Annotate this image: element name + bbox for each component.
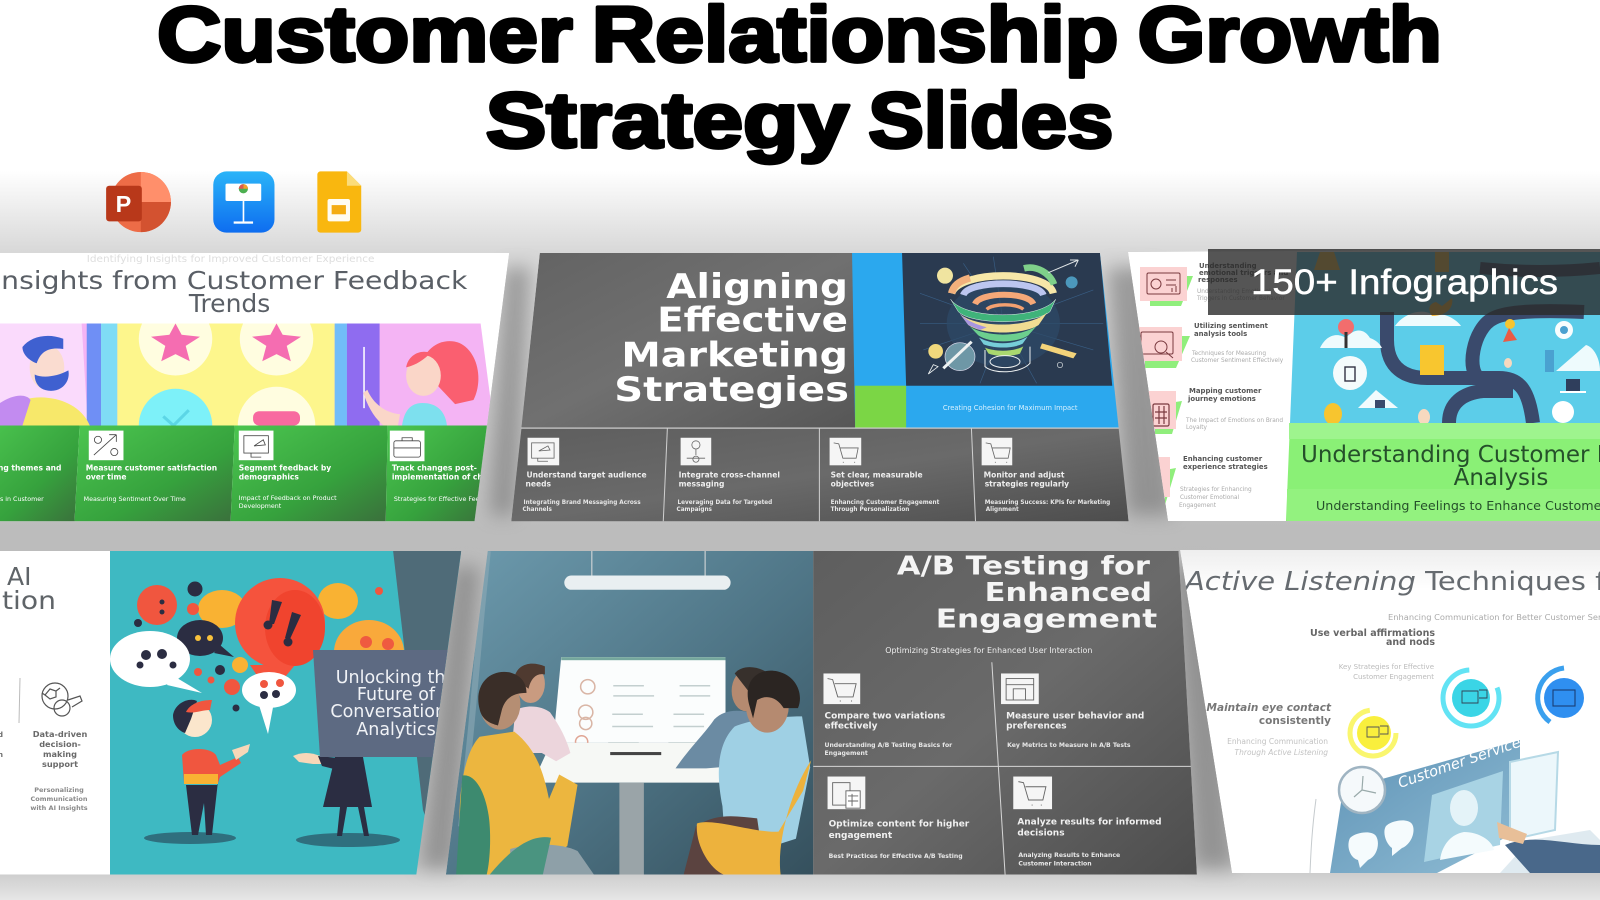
columns text: Monitor and adjust bbox=[984, 471, 1065, 480]
columns text bbox=[522, 471, 1110, 513]
heading: tion bbox=[2, 586, 56, 615]
columns text: Leveraging Data for Targeted bbox=[678, 500, 772, 506]
quadrant text: Customer Interaction bbox=[1018, 860, 1092, 867]
text block: eye contact: Through Active Listening bbox=[1235, 748, 1328, 757]
icon tiles bbox=[89, 431, 424, 461]
icon: PowerPoint: P bbox=[116, 191, 131, 217]
list text: Understanding Emotional bbox=[1197, 289, 1271, 295]
icon rings bbox=[1350, 668, 1584, 756]
heading: Engagement bbox=[936, 605, 1157, 635]
quadrant text: Key Metrics to Measure in A/B Tests bbox=[1007, 742, 1131, 749]
illustration: customer service monitor bbox=[1310, 735, 1600, 873]
quadrant text bbox=[824, 711, 1162, 867]
list text: experience strategies bbox=[1183, 463, 1268, 471]
icon: Keynote bbox=[213, 171, 274, 233]
heading: Active Listening Techniques for bbox=[1183, 567, 1600, 597]
text block: verbal affirmations: Customer Engagement bbox=[1353, 673, 1434, 681]
quadrant text: Analyze results for informed bbox=[1017, 817, 1162, 827]
list text: analysis tools bbox=[1194, 330, 1247, 338]
person: yellow jacket bbox=[459, 732, 578, 874]
quadrant text: effectively bbox=[824, 722, 878, 732]
columns text: Through Personalization bbox=[831, 507, 909, 513]
panel: customer feedback slide bbox=[0, 253, 509, 521]
green band bbox=[1286, 439, 1600, 521]
panel text: Conversational bbox=[330, 702, 462, 722]
list text: The Impact of Emotions on Brand bbox=[1185, 418, 1283, 424]
columns text: implementation of changes bbox=[392, 473, 509, 482]
illustration: conversation bbox=[110, 550, 470, 880]
columns text: Channels bbox=[522, 507, 552, 513]
slide base bbox=[0, 253, 509, 521]
list text: journey emotions bbox=[1187, 395, 1256, 403]
text block: verbal affirmations: and nods bbox=[1386, 637, 1435, 648]
slide base bbox=[1180, 550, 1600, 873]
columns text: Integrate cross-channel bbox=[679, 471, 780, 480]
columns text bbox=[0, 463, 509, 510]
columns text: Alignment bbox=[986, 507, 1019, 513]
list text: Customer Emotional bbox=[1180, 495, 1240, 501]
heading bbox=[614, 267, 849, 409]
list text: Strategies for Enhancing bbox=[1180, 487, 1252, 493]
quadrant text: engagement bbox=[829, 831, 893, 841]
list text: Triggers in Customer Behavior bbox=[1196, 296, 1285, 302]
icon: football and whistle bbox=[42, 683, 82, 716]
columns text: messaging bbox=[679, 480, 724, 489]
columns text: strategies regularly bbox=[985, 480, 1069, 489]
panel: customer emotion slide bbox=[1128, 249, 1600, 521]
title line 2 bbox=[486, 78, 1113, 164]
slide base bbox=[1128, 252, 1295, 521]
item text bbox=[33, 729, 87, 769]
quadrant text: Best Practices for Effective A/B Testing bbox=[829, 853, 963, 860]
heading: Marketing bbox=[621, 335, 848, 374]
divider bbox=[19, 678, 20, 723]
columns text: Impact of Feedback on Product bbox=[239, 495, 337, 502]
item text: decision- bbox=[39, 739, 81, 749]
icon: Google Slides bbox=[317, 171, 361, 233]
quadrant text: Measure user behavior and bbox=[1006, 711, 1144, 721]
panel text: Future of bbox=[357, 685, 436, 705]
green band bbox=[0, 426, 489, 521]
person: left back bbox=[511, 707, 570, 761]
list text: responses bbox=[1198, 276, 1238, 284]
illustration: funnel bbox=[902, 253, 1112, 386]
columns text: Strategies for Effective Feedback bbox=[394, 496, 499, 503]
list text: Techniques for Measuring bbox=[1191, 351, 1266, 357]
list text: Utilizing sentiment bbox=[1194, 322, 1269, 330]
heading: AI bbox=[7, 562, 31, 591]
quadrant text: Optimize content for higher bbox=[829, 820, 970, 830]
text block: eye contact: consistently bbox=[1259, 715, 1331, 727]
slide base bbox=[521, 253, 857, 428]
columns text: Measuring Success: KPIs for Marketing bbox=[985, 500, 1110, 506]
boy bbox=[144, 832, 236, 844]
lower band bbox=[511, 429, 1129, 521]
columns text: Measuring Sentiment Over Time bbox=[84, 496, 186, 503]
columns text: Understand target audience bbox=[527, 471, 647, 480]
item text: support bbox=[42, 759, 78, 769]
title line 2: Strategy bbox=[486, 78, 849, 164]
heading: Analysis bbox=[1454, 465, 1548, 491]
columns text: Integrating Brand Messaging Across bbox=[523, 500, 641, 506]
item text: Data-driven bbox=[33, 729, 87, 739]
list text: Customer Sentiment Effectively bbox=[1191, 358, 1284, 364]
banner: 150+ Infographics: 150+ Infographics bbox=[1251, 263, 1558, 302]
illustration: customer service monitor: Customer Service bbox=[1396, 735, 1523, 792]
list text: Mapping customer bbox=[1189, 387, 1262, 395]
illustration: review app bbox=[0, 324, 490, 426]
list text: Enhancing customer bbox=[1183, 455, 1263, 463]
text block: eye contact bbox=[1207, 702, 1332, 757]
heading: Aligning bbox=[666, 267, 848, 306]
subtitle: Optimizing Strategies for Enhanced User Interaction bbox=[885, 645, 1092, 655]
panel: marketing slide bbox=[511, 253, 1129, 521]
illustration: map bbox=[1288, 250, 1600, 425]
subtitle: Identifying Insights for Improved Customer Experience bbox=[87, 254, 375, 265]
heading: A/B Testing for bbox=[897, 551, 1151, 581]
slide shadows bbox=[420, 267, 1235, 867]
quadrant text: Compare two variations bbox=[824, 711, 945, 721]
heading bbox=[897, 551, 1157, 635]
heading: Enhanced bbox=[985, 578, 1152, 608]
columns text: needs bbox=[526, 480, 552, 489]
text block: verbal affirmations: Use verbal affirmations bbox=[1310, 628, 1435, 639]
columns text: Measure customer satisfaction bbox=[86, 463, 217, 472]
list text: Loyalty bbox=[1186, 425, 1208, 431]
banner: 150+ Infographics bbox=[1208, 249, 1600, 315]
quadrant text: preferences bbox=[1006, 722, 1067, 732]
panel text: Analytics bbox=[356, 720, 436, 740]
right panel bbox=[813, 551, 1197, 874]
photo: meeting room bbox=[446, 551, 813, 874]
icon: PowerPoint bbox=[106, 172, 171, 232]
panel text: Unlocking the bbox=[336, 668, 456, 688]
analytics panel bbox=[313, 650, 460, 757]
heading bbox=[2, 567, 54, 610]
panel: AI conversation analytics slide: with AI Insights bbox=[30, 804, 88, 812]
panel text bbox=[331, 670, 444, 738]
dividers bbox=[813, 662, 1196, 874]
item text: making bbox=[43, 749, 77, 759]
man bbox=[22, 397, 90, 426]
list text bbox=[1179, 262, 1288, 509]
panel: AI conversation analytics slide: Personalizing bbox=[34, 786, 84, 794]
text block: verbal affirmations: Key Strategies for Effective bbox=[1339, 663, 1434, 671]
heading bbox=[1301, 442, 1600, 513]
person: right back bbox=[676, 711, 757, 768]
person: blue shirt bbox=[719, 716, 810, 855]
text block: eye contact: Maintain eye contact bbox=[1207, 702, 1332, 714]
heading: Insights from Customer Feedback bbox=[0, 266, 468, 295]
caption: Creating Cohesion for Maximum Impact bbox=[943, 403, 1078, 412]
heading: Trends bbox=[188, 289, 270, 318]
icon tiles bbox=[823, 673, 1052, 809]
quadrant text: Analyzing Results to Enhance bbox=[1018, 852, 1120, 859]
columns text: over time bbox=[86, 473, 126, 482]
columns text: Segment feedback by bbox=[239, 463, 331, 472]
columns text: objectives bbox=[831, 480, 875, 489]
woman bbox=[296, 833, 400, 847]
quadrant text: Understanding A/B Testing Basics for bbox=[824, 742, 952, 749]
panel: A/B testing slide bbox=[446, 551, 1197, 874]
panel: active listening slide bbox=[1180, 550, 1600, 873]
columns text: Enhancing Customer Engagement bbox=[831, 500, 940, 506]
list icons bbox=[1135, 267, 1193, 505]
heading: Strategies bbox=[614, 370, 849, 409]
colour blocks bbox=[852, 253, 1120, 428]
columns text: Set clear, measurable bbox=[831, 471, 923, 480]
quadrant text: decisions bbox=[1017, 829, 1065, 839]
chairs bbox=[456, 775, 490, 874]
columns text: demographics bbox=[239, 473, 299, 482]
text block: eye contact: Enhancing Communication bbox=[1227, 737, 1328, 746]
heading: Effective bbox=[657, 301, 848, 340]
title line 1 bbox=[157, 0, 1442, 78]
quadrant text: Engagement bbox=[824, 750, 868, 757]
columns text: s in Customer bbox=[0, 496, 44, 503]
columns text: Campaigns bbox=[677, 507, 713, 513]
woman bbox=[428, 341, 478, 404]
list text: Engagement bbox=[1179, 503, 1217, 509]
panel: AI conversation analytics slide bbox=[0, 550, 470, 880]
list text: Understanding bbox=[1199, 262, 1257, 270]
panel: AI conversation analytics slide: Communication bbox=[31, 795, 88, 803]
slide base bbox=[0, 550, 110, 880]
icon tiles bbox=[528, 438, 1012, 465]
text block: verbal affirmations bbox=[1310, 628, 1435, 681]
title line 2: Slides bbox=[868, 78, 1113, 164]
title bbox=[157, 0, 1442, 164]
heading bbox=[4, 270, 468, 312]
dividers bbox=[520, 428, 1120, 521]
columns text: Track changes post- bbox=[392, 463, 477, 472]
list text: emotional triggers and bbox=[1199, 269, 1288, 277]
columns text: Development bbox=[239, 503, 282, 510]
